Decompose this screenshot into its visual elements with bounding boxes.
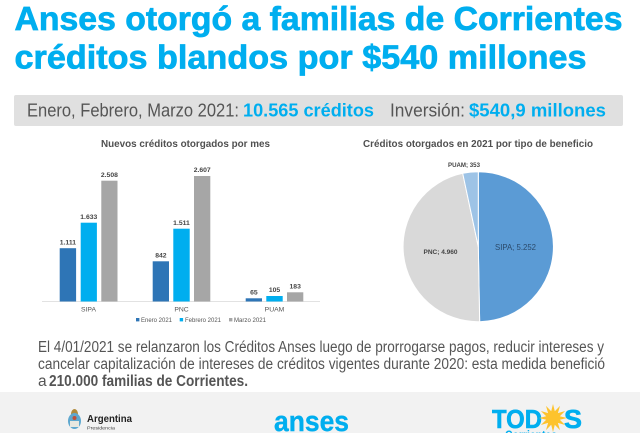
bars: SIPA	[60, 172, 118, 314]
legend	[136, 317, 266, 324]
slice: PNC: PNC; 4.960	[424, 249, 458, 256]
slice: PUAM: PUAM; 353	[448, 162, 480, 169]
bars: PUAM: 65	[250, 290, 258, 296]
bars: PNC	[153, 167, 211, 314]
icon: sun	[539, 404, 567, 432]
description text: 210.000 familias de Corrientes.	[49, 373, 248, 390]
bars: PUAM: 105	[269, 287, 280, 294]
slice: PUAM	[448, 162, 480, 247]
summary band: $540,9 millones	[469, 100, 606, 120]
title	[14, 0, 623, 76]
bars: PNC: 2.607	[194, 167, 211, 174]
bars: SIPA: 1.111	[60, 240, 76, 246]
summary band	[14, 95, 623, 126]
logo: Argentina Presidencia: Argentina	[87, 413, 132, 425]
logo: Argentina Presidencia	[68, 409, 132, 432]
slice: SIPA	[478, 172, 553, 322]
bars: SIPA: 1.633	[80, 214, 98, 221]
description text	[38, 339, 605, 390]
legend: Febrero 2021	[185, 317, 221, 324]
bars: PUAM: PUAM	[265, 306, 285, 314]
bars: PNC: 1.511	[173, 220, 190, 227]
bars: SIPA: SIPA	[81, 306, 96, 314]
title: créditos blandos por $540 millones	[14, 38, 586, 76]
icon: coat of arms	[68, 409, 81, 429]
pie chart title: Créditos otorgados en 2021 por tipo de beneficio	[363, 138, 593, 150]
bars: PNC: 842	[155, 252, 167, 260]
legend: Marzo 2021	[234, 317, 266, 324]
legend: Enero 2021	[141, 317, 172, 324]
bar chart: nuevos créditos por mes	[42, 138, 320, 324]
bars: SIPA: 2.508	[101, 172, 118, 179]
logo: Argentina Presidencia: Presidencia	[87, 426, 115, 432]
footer band	[0, 392, 640, 433]
bars: PNC: PNC	[174, 306, 189, 314]
summary band: Inversión:	[390, 100, 465, 120]
slice: SIPA: SIPA; 5.252	[495, 242, 536, 252]
pie chart: créditos por tipo de beneficio	[363, 138, 593, 322]
logo: Todos Corrientes	[492, 404, 582, 433]
bars: PUAM: 183	[290, 284, 301, 290]
title: Anses otorgó a familias de Corrientes	[14, 0, 623, 37]
bars: PUAM	[246, 284, 303, 314]
description text: a	[38, 373, 47, 390]
slice: PNC	[403, 173, 480, 322]
summary band: Enero, Febrero, Marzo 2021:	[27, 100, 239, 120]
bar chart title: Nuevos créditos otorgados por mes	[101, 138, 270, 150]
summary band: 10.565 créditos	[243, 100, 374, 120]
